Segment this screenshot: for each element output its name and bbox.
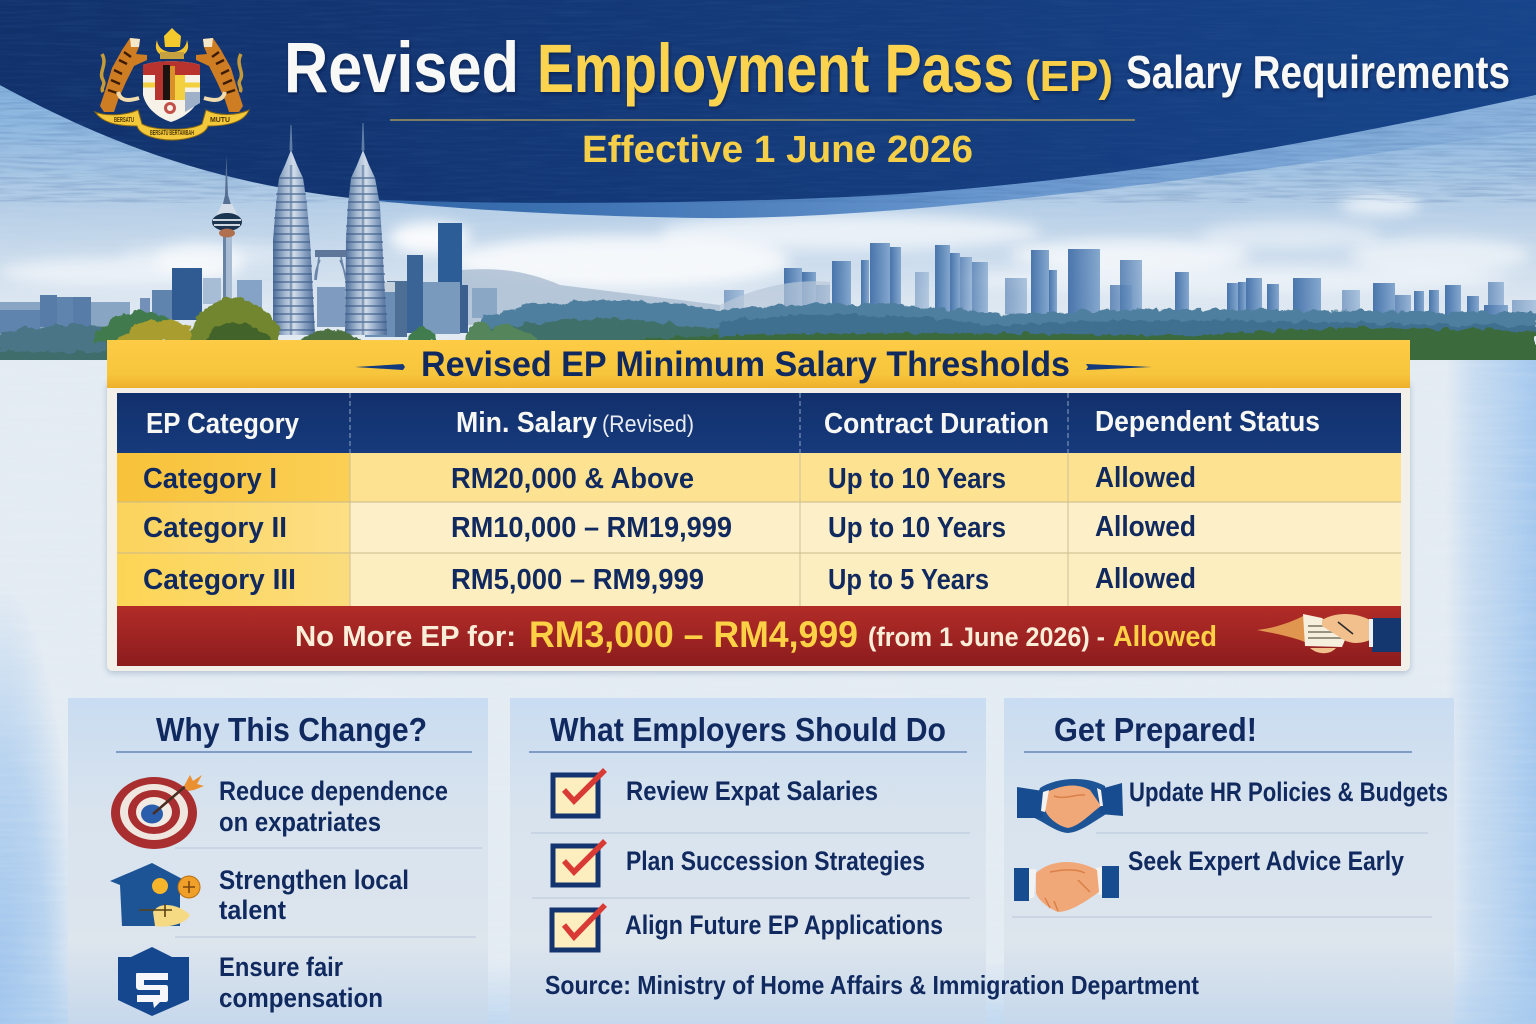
skyline: forest band xyxy=(0,296,1536,360)
skyline: Petronas Twin Towers xyxy=(273,123,387,335)
title: (EP) xyxy=(1025,52,1113,101)
text: plan succession strategies: Plan Succession Strategies xyxy=(626,846,925,876)
salary table card xyxy=(107,340,1410,671)
title: Employment Pass xyxy=(537,30,1014,107)
panel: why this change xyxy=(68,698,488,1024)
table row: Category III: Up to 5 Years xyxy=(828,564,989,596)
trees: under towers xyxy=(300,322,537,340)
emblem scroll: BERSATU BERTAMBAH xyxy=(150,130,194,137)
text: strengthen local talent xyxy=(219,865,409,925)
emblem right tiger xyxy=(196,38,243,112)
emblem: Malaysian coat of arms xyxy=(95,28,249,140)
table row: Category III: Category III xyxy=(143,564,296,596)
table row: Category II: RM10,000 – RM19,999 xyxy=(451,512,732,544)
emblem shield xyxy=(143,61,200,122)
heading: what employers should do: What Employers Should Do xyxy=(550,711,946,748)
table header row: (Revised) xyxy=(602,411,694,438)
icon: handing over document xyxy=(1257,614,1401,653)
table row: Category I: Up to 10 Years xyxy=(828,463,1006,495)
table row: Category II: Allowed xyxy=(1095,511,1196,543)
icon: checkbox 1 xyxy=(553,770,605,816)
table row: Category II: Up to 10 Years xyxy=(828,512,1006,544)
emblem scroll: MUTU xyxy=(210,117,230,124)
warning bar: no more EP xyxy=(117,606,1401,666)
icon: checkbox 3 xyxy=(552,905,605,950)
emblem scroll: BERSATU xyxy=(114,117,134,124)
skyline: distant city on right xyxy=(724,243,1536,319)
panel: what employers should do xyxy=(510,698,986,1024)
table row: Category I xyxy=(117,453,1401,502)
section banner: thresholds heading: Revised EP Minimum Salary Thresholds xyxy=(421,345,1070,384)
skyline: distant hills xyxy=(462,269,830,325)
icon: target with arrow xyxy=(111,775,204,849)
text: ensure fair compensation: Ensure fair xyxy=(219,952,343,982)
icon: house with coins xyxy=(110,863,200,927)
panel: get prepared xyxy=(1004,698,1454,1024)
icon: handshake xyxy=(1014,862,1119,912)
table row: Category II xyxy=(117,502,1401,553)
text: seek expert advice: Seek Expert Advice Early xyxy=(1128,846,1404,876)
table row: Category II: Category II xyxy=(143,512,287,544)
table row: Category III: Allowed xyxy=(1095,563,1196,595)
text: update HR policies: Update HR Policies & Budgets xyxy=(1129,777,1448,807)
table row: Category I: Category I xyxy=(143,463,277,495)
warning bar: no more EP: Allowed xyxy=(1113,621,1217,653)
table row: Category I: Allowed xyxy=(1095,462,1196,494)
skyline: KL Tower xyxy=(212,155,242,300)
warning bar: no more EP: (from 1 June 2026) - xyxy=(868,622,1105,652)
emblem scroll xyxy=(95,110,249,140)
title xyxy=(284,29,1510,108)
emblem left tiger xyxy=(100,38,147,112)
text: reduce dependence: on expatriates xyxy=(219,807,381,837)
table header row: Contract Duration xyxy=(824,408,1049,440)
table row: Category III: RM5,000 – RM9,999 xyxy=(451,564,704,596)
header banner xyxy=(0,0,1536,218)
heading: get prepared: Get Prepared! xyxy=(1054,711,1257,748)
text: reduce dependence: Reduce dependence xyxy=(219,776,448,806)
background: sky with clouds xyxy=(0,0,1536,360)
icon: shield with S xyxy=(118,947,189,1016)
text: ensure fair compensation: compensation xyxy=(219,983,383,1013)
table header row xyxy=(117,393,1401,453)
section banner: thresholds heading xyxy=(107,340,1410,388)
trees: left canopy xyxy=(93,298,280,342)
warning bar: no more EP: No More EP for: xyxy=(295,621,516,653)
table row: Category I: RM20,000 & Above xyxy=(451,463,694,495)
title: Revised xyxy=(284,29,519,108)
source note: Source: Ministry of Home Affairs & Immigration Department xyxy=(545,970,1199,1000)
text: strengthen local talent: talent xyxy=(219,895,286,925)
table header row: Dependent Status xyxy=(1095,406,1320,438)
text: align future EP applications: Align Future EP Applications xyxy=(625,910,943,940)
subtitle: effective date: Effective 1 June 2026 xyxy=(582,129,973,171)
background: lower paper wash xyxy=(0,360,1536,1024)
table header row: Min. Salary xyxy=(456,407,597,439)
table header row: EP Category xyxy=(146,408,299,440)
skyline: left city blocks xyxy=(0,223,497,342)
warning bar: no more EP: RM3,000 – RM4,999 xyxy=(529,614,858,655)
text: review expat salaries: Review Expat Salaries xyxy=(626,776,878,806)
icon: checkbox 2 xyxy=(553,841,605,885)
text: strengthen local talent: Strengthen local xyxy=(219,865,409,895)
text: reduce dependence xyxy=(219,776,448,837)
text: ensure fair compensation xyxy=(219,952,383,1013)
table row: Category III xyxy=(117,553,1401,606)
emblem crown and crescent xyxy=(156,28,188,59)
icon: handshake on blue band xyxy=(1017,779,1123,833)
heading: why this change: Why This Change? xyxy=(156,711,427,748)
